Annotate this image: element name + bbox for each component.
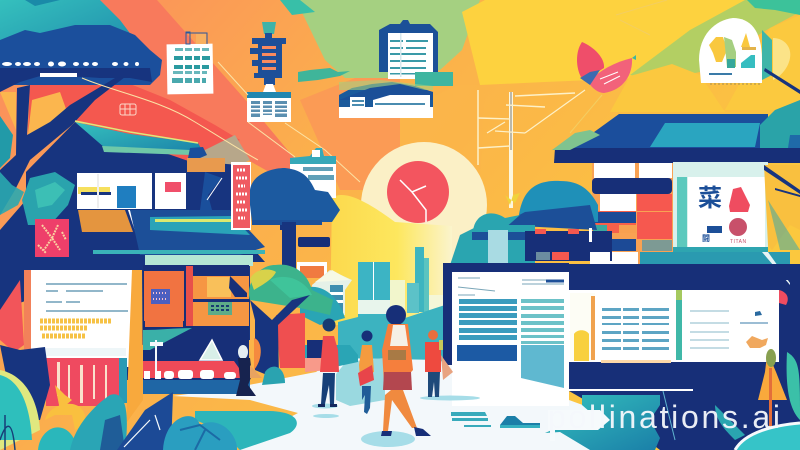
red accent behind board <box>779 290 788 305</box>
left building: pink decorative poster <box>35 219 69 257</box>
person: woman in tan walking <box>381 305 431 436</box>
right panel: main info board <box>569 290 779 363</box>
left building: lower roof <box>78 210 265 266</box>
left shopfront: orange panels and windows <box>143 265 250 347</box>
infographic card: top document with roof <box>379 20 453 86</box>
foliage: top-right teal <box>747 0 800 15</box>
badge: white arch icon top right <box>699 18 790 84</box>
distant small office building <box>290 148 336 198</box>
distant city skyline <box>358 247 445 325</box>
foliage: bottom left plants <box>0 345 297 450</box>
left building: teal roof <box>75 121 207 158</box>
right building: signboard with Chinese glyphs: TITAN <box>730 239 747 245</box>
red vertical sign <box>231 162 251 230</box>
canopy lights: white dashes <box>2 62 139 77</box>
courtyard tree in green <box>249 265 358 380</box>
white lawn / ground path <box>173 358 610 450</box>
utility pole with wires <box>478 0 667 208</box>
left building: navy body <box>0 122 265 380</box>
right building: signboard with Chinese glyphs: 菜 <box>698 185 722 212</box>
right building: signboard with Chinese glyphs: 闘 <box>702 234 710 243</box>
left board: info poster <box>0 270 143 422</box>
infographic card: white office building <box>247 84 291 122</box>
right building: coloured facade blocks <box>565 163 674 268</box>
tree trunk behind building <box>200 172 290 230</box>
thin connector lines <box>82 62 360 182</box>
tree: left trunk and branches <box>0 68 152 215</box>
small roof and cream wall behind tree <box>297 237 352 315</box>
watermark text: pollinations.ai <box>548 399 780 435</box>
foliage: teal hedge behind people <box>338 305 445 368</box>
tree: blue cloud tree centre <box>250 168 340 292</box>
person: woman in black dress <box>236 345 262 396</box>
centre-right tree and house <box>450 181 612 265</box>
person: right figure with orange cape <box>758 349 787 428</box>
person: far right figure in red <box>425 330 453 397</box>
stepping stones and shoes on path <box>451 412 540 428</box>
light teal lawn patch <box>336 358 385 406</box>
person shadows <box>312 396 480 447</box>
right building: roof <box>552 100 800 163</box>
red leaf emblem <box>577 42 636 93</box>
infographic card: floating calendar sheet <box>167 32 213 94</box>
infographic card: green leaf cloud <box>298 68 350 82</box>
sun: cream disc with red circle <box>330 142 487 325</box>
foliage: teal leaves left of building <box>0 116 75 225</box>
canopy: top-left teal foliage <box>0 0 315 85</box>
person: man in red <box>318 318 339 407</box>
white sign shape over teal <box>548 410 610 441</box>
person: child in orange <box>358 330 374 414</box>
left building: upper windows <box>77 158 225 209</box>
small sketch icon on coral <box>120 104 136 115</box>
infographic card: panorama building panel <box>339 80 433 118</box>
right building: lower navy body <box>569 265 800 450</box>
right panel: data table board <box>443 263 569 406</box>
small foliage by path <box>262 367 285 385</box>
infographic card: blue tower icon <box>250 22 286 85</box>
right building: signboard with Chinese glyphs <box>673 162 800 252</box>
left shopfront: red counter with triangle <box>143 328 250 394</box>
branch top right <box>764 68 800 94</box>
foliage: bottom right teal <box>545 352 800 450</box>
